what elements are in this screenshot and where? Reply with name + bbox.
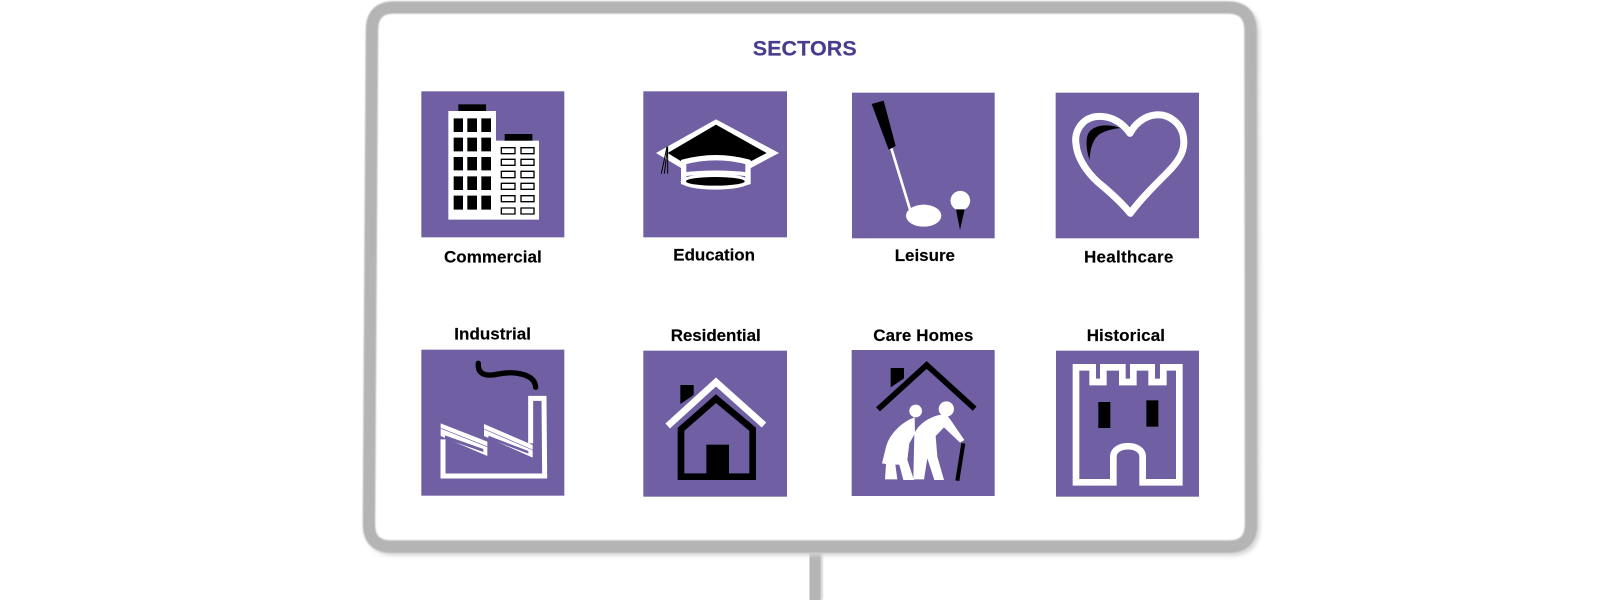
panel: leisure xyxy=(852,93,995,265)
panel: industrial xyxy=(421,324,564,496)
icon: house xyxy=(643,351,787,497)
icon: golf club and ball xyxy=(852,93,995,238)
label: Historical xyxy=(1087,326,1165,345)
label: Industrial xyxy=(454,324,531,343)
label: Healthcare xyxy=(1084,248,1173,267)
label: Care Homes xyxy=(873,326,973,345)
icon: office buildings xyxy=(421,91,564,237)
panel: education xyxy=(643,91,787,264)
label: Leisure xyxy=(895,246,955,265)
panel: historical xyxy=(1056,326,1199,497)
icon: heart xyxy=(1056,93,1199,238)
panel: residential xyxy=(643,326,787,497)
label: Commercial xyxy=(444,247,542,266)
panel: commercial xyxy=(421,91,564,266)
icon: elderly couple under roof xyxy=(852,350,995,496)
panel: care homes xyxy=(852,326,995,496)
icon: factory xyxy=(421,350,564,496)
panel: healthcare xyxy=(1056,93,1199,267)
label: Residential xyxy=(671,326,761,345)
icon: graduation cap xyxy=(643,91,787,237)
label: Education xyxy=(673,245,755,264)
board frame xyxy=(369,8,1254,550)
signpost stem xyxy=(810,552,823,600)
icon: castle xyxy=(1056,351,1199,497)
title: SECTORS xyxy=(753,37,857,61)
